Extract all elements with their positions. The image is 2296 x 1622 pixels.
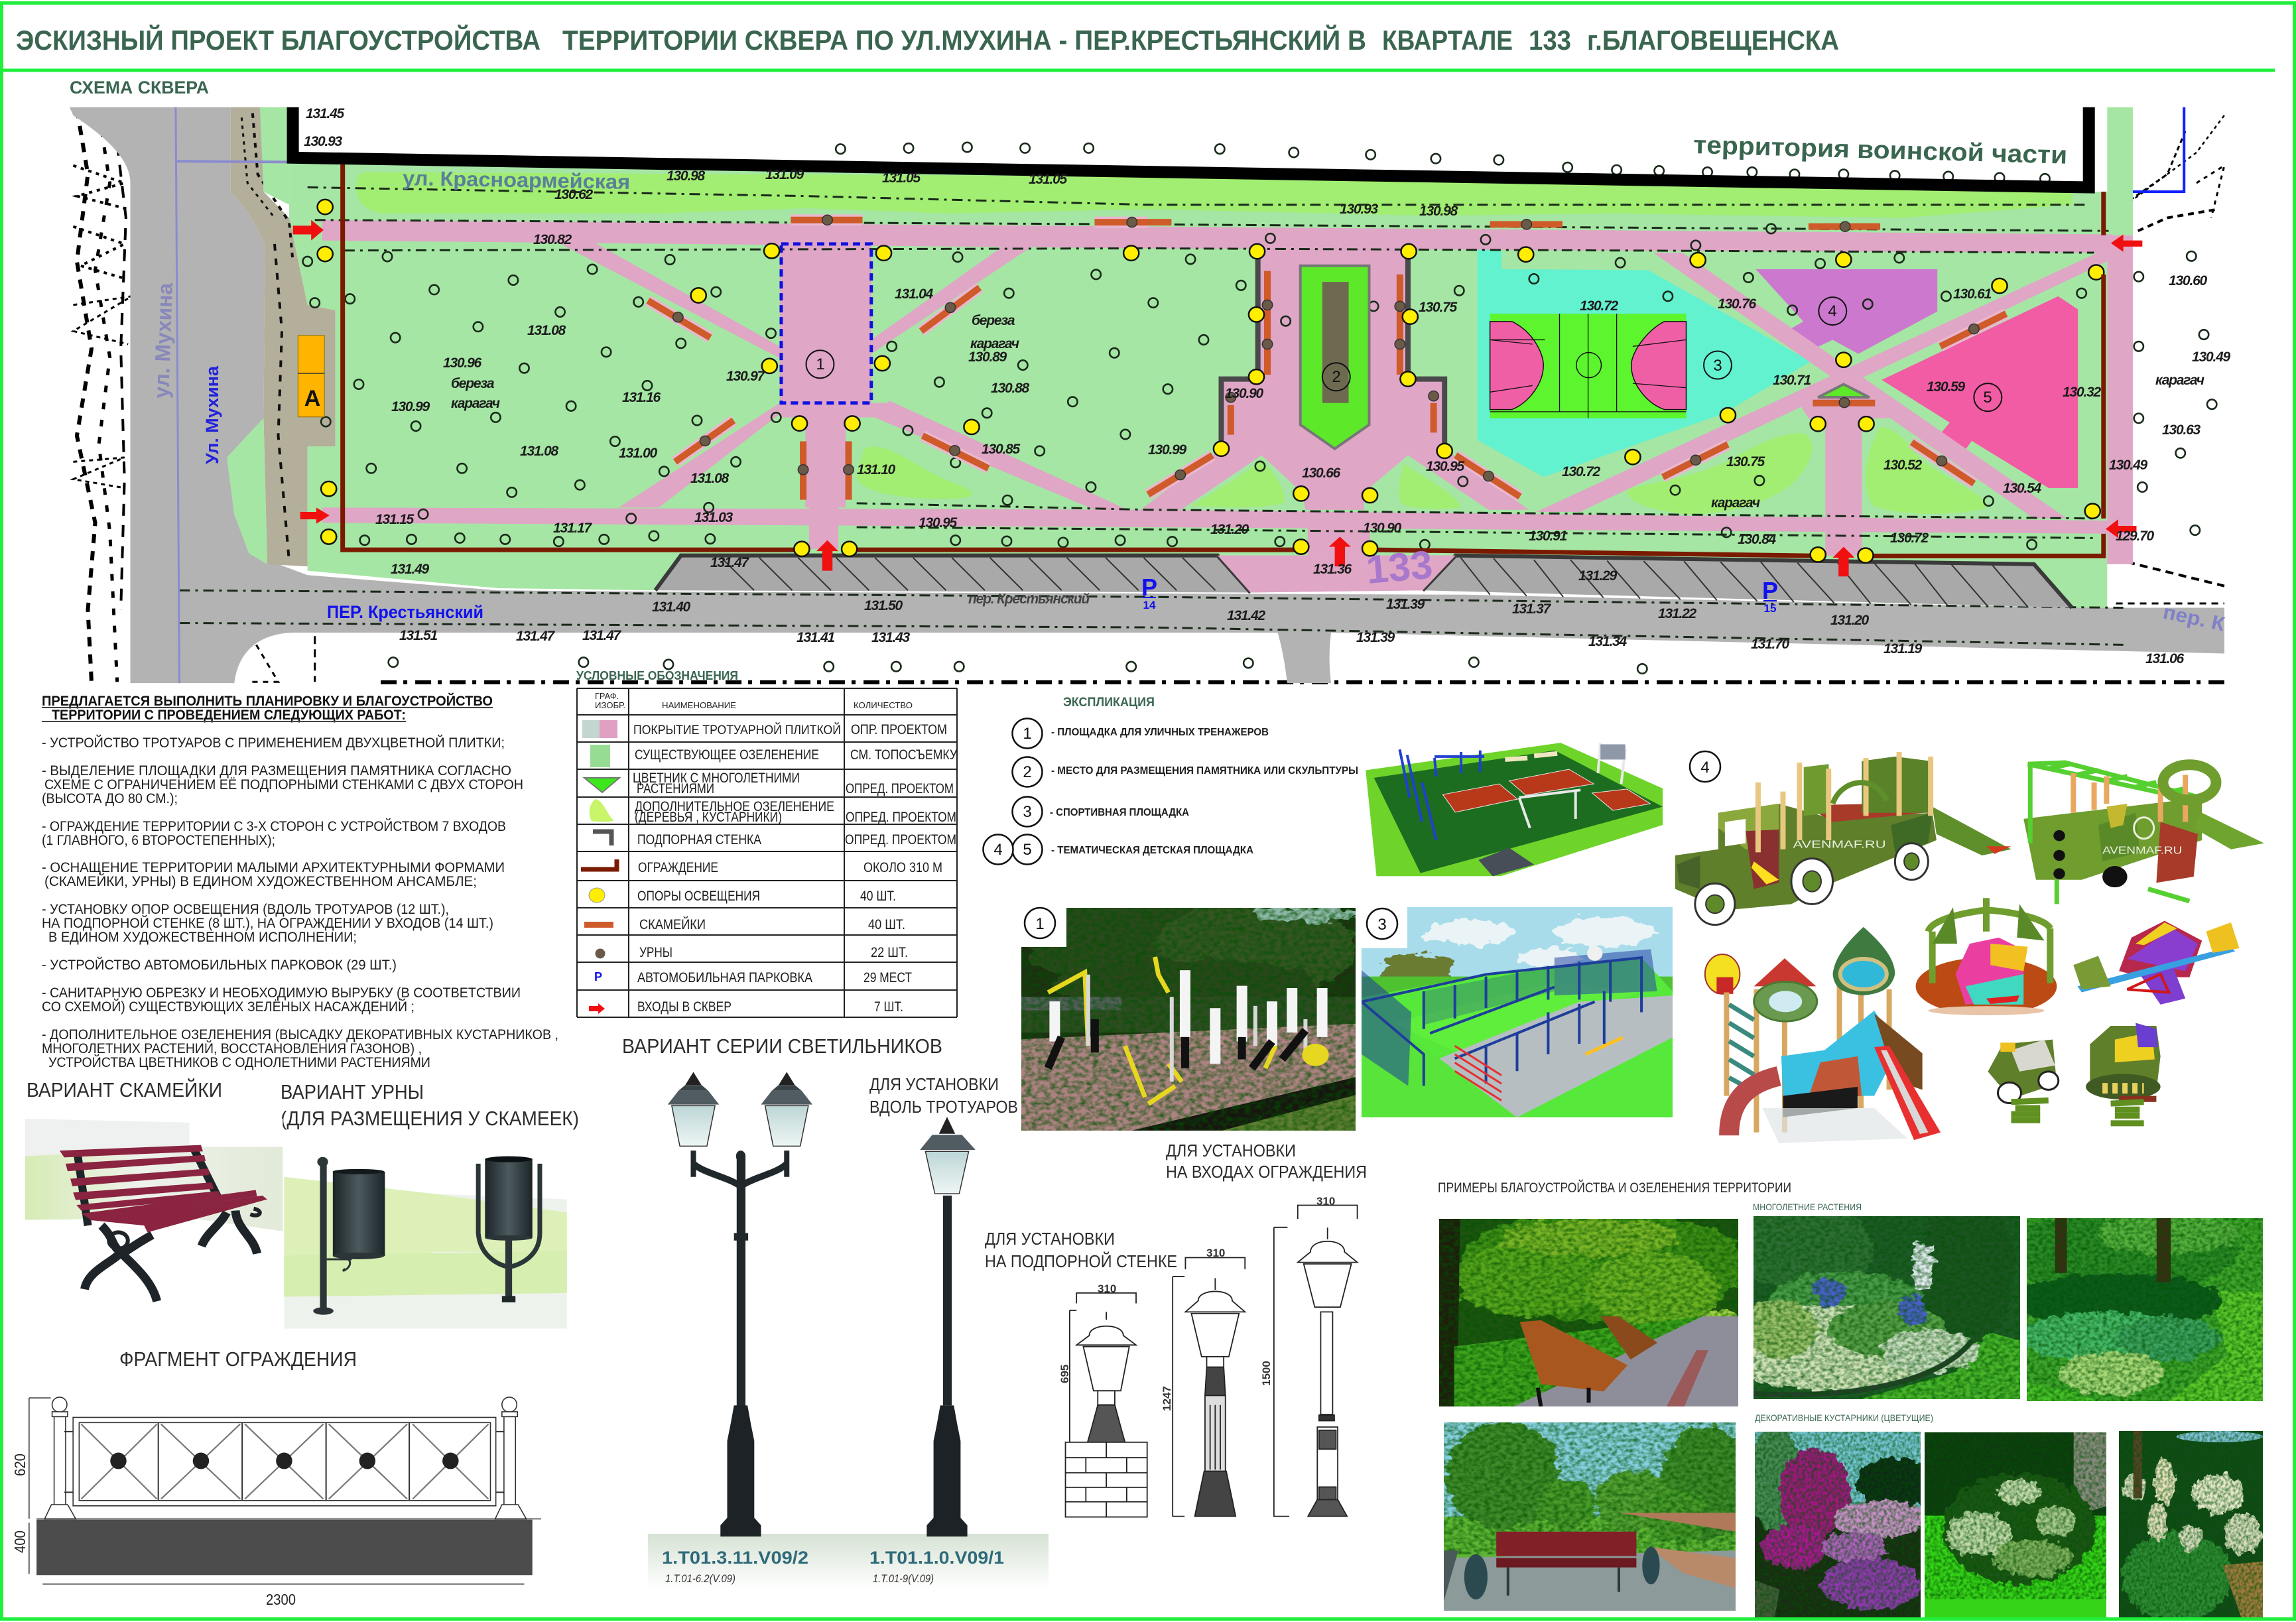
survey labels: 131.39 [1356, 630, 1395, 645]
lamp caption: at fence entrances: НА ВХОДАХ ОГРАЖДЕНИЯ [1166, 1162, 1367, 1182]
explication list: 3 [1023, 803, 1032, 821]
legend rows text: 40 ШТ. [860, 889, 896, 904]
background survey noise [73, 109, 2226, 682]
list items: - ВЫДЕЛЕНИЕ ПЛОЩАДКИ ДЛЯ РАЗМЕЩЕНИЯ ПАМЯТНИКА СОГЛАСНО [42, 763, 511, 779]
survey labels: 129.70 [2116, 529, 2155, 544]
surveyed trees [303, 143, 2216, 674]
image: truck playground: AVENMAF.RU [1793, 840, 1886, 851]
survey labels: 131.03 [694, 510, 733, 525]
heading: urn variant: ВАРИАНТ УРНЫ [281, 1080, 424, 1103]
zone 5: magenta children's area [1881, 296, 2078, 488]
survey labels: карагач [2155, 373, 2204, 388]
legend header: ИЗОБР. [595, 700, 625, 710]
survey labels: 130.32 [2063, 385, 2102, 400]
survey labels: пер. Крестьянский [968, 592, 1090, 607]
survey labels: 130.98 [667, 168, 706, 184]
photo: rhododendrons [1755, 1432, 1921, 1617]
legend rows text: ОПРЕД. ПРОЕКТОМ [846, 810, 956, 825]
title: ЭСКИЗНЫЙ ПРОЕКТ БЛАГОУСТРОЙСТВА [16, 24, 541, 56]
entrance arrows [293, 220, 2142, 576]
legend rows text: ДОПОЛНИТЕЛЬНОЕ ОЗЕЛЕНЕНИЕ [635, 799, 834, 814]
list items: - ОГРАЖДЕНИЕ ТЕРРИТОРИИ С 3-Х СТОРОН С УСТРОЙСТВОМ 7 ВХОДОВ [42, 818, 506, 834]
blue dashed monument-area boundary for zone 1 [781, 244, 871, 403]
street label: Krestyansky: ПЕР. Крестьянский [327, 602, 483, 622]
survey labels: 130.90 [1225, 386, 1264, 401]
title [16, 24, 1839, 56]
survey labels: 131.29 [1578, 568, 1618, 584]
legend rows text: ПОКРЫТИЕ ТРОТУАРНОЙ ПЛИТКОЙ [633, 723, 841, 737]
retaining walls [1221, 257, 1444, 444]
drawing: mid-height lamp [1173, 1258, 1245, 1517]
survey labels: 130.95 [1426, 459, 1465, 474]
photo 1 badge: 1 [1035, 915, 1045, 933]
heading: fence fragment: ФРАГМЕНТ ОГРАЖДЕНИЯ [119, 1347, 357, 1371]
label: military territory: территория воинской части [1693, 131, 2068, 170]
survey labels: 131.05 [1029, 172, 1068, 187]
entrance plaza pink overlay [1218, 556, 1456, 593]
list items: - УСТРОЙСТВО АВТОМОБИЛЬНЫХ ПАРКОВОК (29 ШТ.) [42, 957, 397, 973]
list heading [42, 693, 493, 723]
explication list [983, 719, 1358, 865]
list items: (1 ГЛАВНОГО, 6 ВТОРОСТЕПЕННЫХ); [42, 833, 275, 848]
image: carousel playground [1916, 898, 2057, 1015]
survey labels: 131.10 [857, 462, 896, 477]
survey labels: 131.36 [1313, 562, 1352, 577]
photo: perennials border [1754, 1216, 2020, 1399]
explication list: 4 [993, 841, 1003, 859]
survey labels: 130.54 [2003, 481, 2042, 496]
lawn areas [227, 107, 2133, 608]
drawing: tall lamp [1274, 1206, 1358, 1517]
explication list: - СПОРТИВНАЯ ПЛОЩАДКА [1050, 807, 1189, 818]
lamp: single-headed pole [920, 1117, 976, 1536]
legend symbols: Р [594, 970, 602, 983]
kiosk letter: А [304, 386, 320, 411]
survey labels: 130.49 [2192, 349, 2231, 365]
list items: УСТРОЙСТВА ЦВЕТНИКОВ С ОДНОЛЕТНИМИ РАСТЕНИЯМИ [48, 1054, 430, 1070]
black boundary wall of military territory [293, 107, 2089, 188]
survey labels: 130.93 [304, 134, 343, 149]
image: truck playground [1675, 752, 2011, 925]
list items: - ОСНАЩЕНИЕ ТЕРРИТОРИИ МАЛЫМИ АРХИТЕКТУРНЫМИ ФОРМАМИ [42, 860, 505, 875]
sidewalk survey scribbles [241, 113, 293, 562]
legend rows text: (ДЕРЕВЬЯ , КУСТАРНИКИ) [635, 810, 782, 825]
legend rows text: ПОДПОРНАЯ СТЕНКА [637, 832, 761, 847]
survey labels: 131.70 [1751, 637, 1790, 652]
survey labels: 131.47 [516, 629, 556, 644]
image: tower playground [1705, 927, 1941, 1143]
survey labels: 130.59 [1927, 379, 1966, 395]
drawing: fence fragment with dimensions [29, 1397, 541, 1584]
list items: СХЕМЕ С ОГРАНИЧЕНИЕМ ЕЁ ПОДПОРНЫМИ СТЕНКАМИ С ДВУХ СТОРОН [44, 777, 523, 792]
title: 133 [1529, 25, 1571, 56]
survey labels: 130.91 [1529, 529, 1567, 544]
legend rows text: ОПРЕД. ПРОЕКТОМ [846, 781, 954, 796]
existing lime planting beds [356, 172, 2072, 499]
lamp caption: on retaining wall [985, 1229, 1177, 1271]
fence dimension labels: 620 [11, 1454, 29, 1476]
survey labels: 131.39 [1386, 597, 1425, 612]
survey labels: 130.90 [1363, 521, 1402, 536]
survey labels: карагач [1711, 495, 1760, 511]
survey labels: карагач [451, 396, 500, 411]
image: 3D model of gym ground [1366, 743, 1663, 876]
lamp caption: on retaining wall: ДЛЯ УСТАНОВКИ [985, 1229, 1115, 1249]
lamp sub-codes: 1.T.01-9(V.09) [873, 1572, 934, 1585]
survey labels: береза [972, 313, 1015, 328]
lamp model codes: 1.T01.1.0.V09/1 [869, 1548, 1004, 1568]
survey labels: 131.04 [895, 286, 934, 302]
heading: perennials: МНОГОЛЕТНИЕ РАСТЕНИЯ [1753, 1202, 1862, 1212]
legend rows text: СМ. ТОПОСЪЕМКУ [850, 747, 958, 763]
legend heading: УСЛОВНЫЕ ОБОЗНАЧЕНИЯ [576, 669, 738, 682]
explication list: - ПЛОЩАДКА ДЛЯ УЛИЧНЫХ ТРЕНАЖЕРОВ [1051, 727, 1269, 738]
explication list: - ТЕМАТИЧЕСКАЯ ДЕТСКАЯ ПЛОЩАДКА [1051, 845, 1253, 856]
explication heading: ЭКСПЛИКАЦИЯ [1063, 696, 1155, 710]
image: seesaw playground [2073, 921, 2239, 1005]
survey labels: 130.62 [554, 187, 594, 202]
legend header [595, 691, 913, 710]
plan circle numbers: 5 [1983, 389, 1992, 406]
photo 3: fenced sports ground [1362, 907, 1673, 1117]
heading: bench variant: ВАРИАНТ СКАМЕЙКИ [27, 1078, 222, 1101]
survey labels: 130.66 [1302, 466, 1341, 481]
legend rows text [633, 722, 958, 1015]
list items: СО СХЕМОЙ) СУЩЕСТВУЮЩИХ ЗЕЛЁНЫХ НАСАЖДЕНИЙ ; [42, 999, 415, 1015]
street label: Krasnoarmeyskaya: ул. Красноармейская [403, 166, 630, 194]
heading: examples of landscaping: ПРИМЕРЫ БЛАГОУСТРОЙСТВА И ОЗЕЛЕНЕНИЯ ТЕРРИТОРИИ [1438, 1180, 1791, 1196]
survey labels: 131.37 [1512, 601, 1552, 617]
lane label at right: пер. К [2161, 601, 2227, 636]
list items: (СКАМЕЙКИ, УРНЫ) В ЕДИНОМ ХУДОЖЕСТВЕННОМ АНСАМБЛЕ; [44, 873, 477, 889]
list items: НА ПОДПОРНОЙ СТЕНКЕ (8 ШТ.), НА ОГРАЖДЕНИИ У ВХОДОВ (14 ШТ.) [42, 915, 493, 931]
survey labels: 131.20 [1830, 613, 1870, 628]
lamp dimensions: 1500 [1260, 1361, 1273, 1386]
survey labels: 130.72 [1562, 464, 1601, 479]
survey labels: 130.89 [968, 349, 1007, 365]
image: spring rider tractor [1988, 1040, 2059, 1120]
legend header: НАИМЕНОВАНИЕ [662, 700, 736, 710]
heading: square scheme: СХЕМА СКВЕРА [70, 78, 209, 97]
survey labels: 130.96 [443, 355, 482, 371]
lamp sub-codes: 1.T.01-6.2(V.09) [665, 1572, 735, 1585]
plan circle numbers: 1 [816, 355, 825, 373]
photo 1 badge [1021, 908, 1066, 947]
survey labels: 131.49 [391, 562, 430, 577]
survey labels: 130.85 [982, 442, 1021, 457]
list items: МНОГОЛЕТНИХ РАСТЕНИЙ, ВОССТАНОВЛЕНИЯ ГАЗОНОВ) , [42, 1040, 422, 1056]
survey labels: 130.72 [1580, 298, 1619, 314]
sidewalk strip and kiosk pad [231, 107, 336, 566]
site plan drawing [70, 107, 2226, 683]
legend rows text: ВХОДЫ В СКВЕР [637, 999, 732, 1015]
road: Mukhina street and Krestyansky lane [70, 107, 2224, 683]
legend rows text: УРНЫ [639, 945, 672, 960]
legend rows text: ОКОЛО 310 М [863, 860, 942, 875]
quarter number: 133 [1364, 542, 1435, 592]
list items: В ЕДИНОМ ХУДОЖЕСТВЕННОМ ИСПОЛНЕНИИ; [48, 930, 357, 945]
lamp caption: along pavements: ДЛЯ УСТАНОВКИ [869, 1074, 999, 1094]
survey labels: 131.15 [375, 512, 415, 527]
survey labels: 130.84 [1738, 532, 1777, 547]
fence dimension labels [11, 1454, 296, 1608]
parking label 15: Р [1762, 577, 1778, 604]
survey labels: 131.20 [1210, 522, 1249, 537]
title divider [0, 69, 2275, 72]
legend rows text: 22 ШТ. [871, 945, 908, 960]
explication list: 5 [1023, 841, 1032, 859]
basketball court [1490, 314, 1687, 418]
survey labels: 130.93 [1340, 202, 1379, 217]
survey labels: 130.61 [1953, 286, 1992, 302]
lamp caption: along pavements: ВДОЛЬ ТРОТУАРОВ [869, 1097, 1018, 1117]
survey labels: 130.71 [1773, 373, 1811, 388]
legend rows text: АВТОМОБИЛЬНАЯ ПАРКОВКА [637, 970, 812, 985]
fence dimension labels: 400 [11, 1530, 29, 1553]
explication list: 2 [1023, 763, 1032, 781]
survey labels: 131.17 [553, 521, 593, 536]
list items: - САНИТАРНУЮ ОБРЕЗКУ И НЕОБХОДИМУЮ ВЫРУБКУ (В СООТВЕТСТВИИ [42, 985, 521, 1001]
survey labels: 130.75 [1419, 300, 1458, 315]
image: airplane playground [2023, 763, 2264, 904]
lamp caption: at fence entrances [1166, 1141, 1367, 1182]
survey labels: 131.05 [882, 170, 921, 186]
image: spring rider tank [2086, 1023, 2161, 1123]
lamp sub-codes [665, 1572, 934, 1585]
fence-gate light poles [794, 539, 1874, 563]
lamp caption: at fence entrances: ДЛЯ УСТАНОВКИ [1166, 1141, 1296, 1160]
street axis line [176, 107, 179, 683]
lamp dimensions: 310 [1316, 1195, 1335, 1208]
survey labels: 131.47 [710, 555, 750, 570]
lamp dimensions: 695 [1058, 1365, 1071, 1383]
survey labels: 131.00 [619, 446, 658, 461]
image: urns [284, 1156, 567, 1329]
legend rows text: 7 ШТ. [874, 999, 903, 1015]
survey labels: 131.16 [622, 390, 661, 405]
lamp model codes [662, 1548, 1004, 1568]
survey labels: 130.99 [1148, 442, 1187, 458]
lamp model codes: 1.T01.3.11.V09/2 [662, 1548, 808, 1568]
survey dashed lines [179, 188, 2124, 645]
survey labels: 131.47 [582, 628, 622, 643]
list items: - ДОПОЛНИТЕЛЬНОЕ ОЗЕЛЕНЕНИЯ (ВЫСАДКУ ДЕКОРАТИВНЫХ КУСТАРНИКОВ , [42, 1027, 558, 1042]
parking label 14: 14 [1143, 599, 1156, 611]
list heading: ПРЕДЛАГАЕТСЯ ВЫПОЛНИТЬ ПЛАНИРОВКУ И БЛАГОУСТРОЙСТВО [42, 693, 493, 709]
image: circle 4 badge: 4 [1700, 759, 1710, 777]
survey labels: 131.41 [797, 630, 835, 645]
title: г.БЛАГОВЕЩЕНСКА [1587, 25, 1839, 56]
survey labels: 131.06 [2145, 651, 2185, 666]
paved walkways [322, 220, 2133, 593]
drawing: wall-mounted lamp on brick pier [1066, 1293, 1147, 1517]
benches and urns [648, 215, 2006, 500]
legend rows text: ОПОРЫ ОСВЕЩЕНИЯ [637, 889, 760, 904]
numbered circles on plan [806, 297, 2002, 411]
street label: Mukhina blue: Ул. Мухина [202, 365, 222, 464]
photo: garden with hostas [2027, 1218, 2263, 1401]
legend rows text: ОГРАЖДЕНИЕ [638, 860, 718, 875]
survey labels: 130.60 [2169, 273, 2208, 288]
photo: park alley with benches [1439, 1219, 1738, 1406]
legend rows text: ОПРЕД. ПРОЕКТОМ [845, 832, 956, 847]
photo: square with bench [1444, 1422, 1736, 1611]
parking label 14: Р [1141, 574, 1157, 601]
lamp ground strip [648, 1534, 1049, 1589]
heading: decorative shrubs: ДЕКОРАТИВНЫЕ КУСТАРНИКИ (ЦВЕТУЩИЕ) [1755, 1412, 1933, 1423]
heading: urn placement: (ДЛЯ РАЗМЕЩЕНИЯ У СКАМЕЕК) [281, 1107, 579, 1130]
survey labels: 131.09 [765, 167, 804, 182]
zone 4: purple children's area [1755, 269, 1937, 353]
survey labels: 131.51 [399, 628, 438, 643]
survey labels: 131.42 [1227, 608, 1266, 623]
photo 3 badge: 3 [1377, 916, 1387, 934]
lamp caption: along pavements [869, 1074, 1018, 1117]
survey labels: 130.99 [391, 399, 430, 414]
survey labels: 131.40 [652, 599, 691, 615]
legend rows text: ЦВЕТНИК С МНОГОЛЕТНИМИ [633, 771, 800, 786]
survey labels: 130.72 [1890, 530, 1929, 546]
small flower triangle [1818, 384, 1870, 397]
street label: Mukhina grey: ул. Мухина [149, 282, 177, 399]
legend rows text: СКАМЕЙКИ [639, 916, 706, 932]
photo 3 badge [1362, 907, 1407, 948]
survey labels: 131.19 [1883, 641, 1923, 656]
lamp dimensions: 310 [1098, 1282, 1116, 1295]
fence dimension labels: 2300 [266, 1591, 296, 1608]
lamp: two-headed pole [668, 1072, 812, 1536]
photo: white plume shrub [2119, 1431, 2263, 1617]
list items: - УСТРОЙСТВО ТРОТУАРОВ С ПРИМЕНЕНИЕМ ДВУХЦВЕТНОЙ ПЛИТКИ; [42, 735, 505, 751]
kiosk [298, 336, 324, 417]
survey labels: 131.08 [520, 444, 559, 459]
parking label 15: 15 [1764, 602, 1776, 615]
heading: lamp series: ВАРИАНТ СЕРИИ СВЕТИЛЬНИКОВ [622, 1034, 942, 1058]
explication list: - МЕСТО ДЛЯ РАЗМЕЩЕНИЯ ПАМЯТНИКА ИЛИ СКУЛЬПТУРЫ [1051, 765, 1358, 777]
plan circle numbers [816, 302, 1992, 406]
photo: white shrub [1925, 1432, 2106, 1617]
survey labels: 130.97 [726, 369, 766, 384]
legend rows text: 40 ШТ. [868, 917, 905, 932]
legend header: ГРАФ. [595, 691, 619, 701]
survey labels: 130.82 [533, 232, 572, 247]
survey labels: береза [451, 376, 495, 391]
lamp dimensions: 1247 [1161, 1386, 1173, 1411]
plan circle numbers: 3 [1713, 357, 1722, 375]
list of proposed works [42, 693, 558, 1070]
title: ТЕРРИТОРИИ СКВЕРА ПО УЛ.МУХИНА - ПЕР.КРЕСТЬЯНСКИЙ В [562, 24, 1366, 56]
legend symbols [581, 720, 619, 1014]
blue survey corner [2133, 107, 2184, 192]
explication list: 1 [1023, 725, 1032, 743]
survey labels: 130.98 [1419, 204, 1458, 219]
light poles [318, 200, 2104, 544]
survey labels: 130.88 [991, 381, 1030, 396]
lamp caption: on retaining wall: НА ПОДПОРНОЙ СТЕНКЕ [985, 1251, 1177, 1271]
survey labels: 131.43 [871, 630, 911, 645]
parking lots with hatching [655, 556, 2072, 608]
zone 2: monument flower bed [1301, 266, 1369, 449]
survey labels: 130.63 [2162, 422, 2201, 438]
photo 1: outdoor exercise machines [1021, 908, 1356, 1131]
zone 3: sports ground surface [1478, 248, 1811, 477]
survey labels: 131.22 [1658, 606, 1697, 621]
survey labels: 131.50 [864, 598, 903, 613]
legend rows text: РАСТЕНИЯМИ [637, 781, 714, 796]
survey labels: карагач [970, 336, 1019, 351]
survey labels: 131.08 [527, 323, 566, 338]
title: КВАРТАЛЕ [1382, 25, 1513, 56]
image: circle 4 badge [1690, 751, 1720, 782]
legend header: КОЛИЧЕСТВО [854, 700, 913, 710]
legend rows text: 29 МЕСТ [863, 970, 912, 985]
legend table [577, 688, 958, 1017]
lamp dimensions [1058, 1195, 1335, 1411]
survey labels: 131.34 [1588, 634, 1627, 649]
legend rows text: ОПР. ПРОЕКТОМ [851, 722, 947, 737]
survey labels: 130.49 [2109, 458, 2148, 473]
survey labels: 130.75 [1726, 454, 1765, 469]
boundary stub line [176, 161, 289, 162]
lamp dimensions: 310 [1206, 1247, 1225, 1259]
survey labels [304, 106, 2231, 666]
survey labels: 130.95 [919, 515, 958, 530]
list heading: ТЕРРИТОРИИ С ПРОВЕДЕНИЕМ СЛЕДУЮЩИХ РАБОТ: [52, 708, 406, 723]
list items: - УСТАНОВКУ ОПОР ОСВЕЩЕНИЯ (ВДОЛЬ ТРОТУАРОВ (12 ШТ.), [42, 902, 449, 917]
survey labels: 131.08 [690, 471, 730, 486]
plan circle numbers: 4 [1828, 302, 1837, 320]
survey labels: 130.52 [1883, 458, 1923, 473]
image: bench [25, 1119, 283, 1304]
list items: (ВЫСОТА ДО 80 СМ.); [42, 791, 178, 806]
survey labels: 130.76 [1718, 296, 1757, 312]
legend rows text: СУЩЕСТВУЮЩЕЕ ОЗЕЛЕНЕНИЕ [635, 747, 819, 763]
survey labels: 131.45 [306, 106, 345, 121]
perimeter fence [343, 163, 2104, 556]
list items [42, 735, 558, 1070]
plan circle numbers: 2 [1332, 368, 1341, 386]
image: airplane playground: AVENMAF.RU [2102, 845, 2182, 857]
